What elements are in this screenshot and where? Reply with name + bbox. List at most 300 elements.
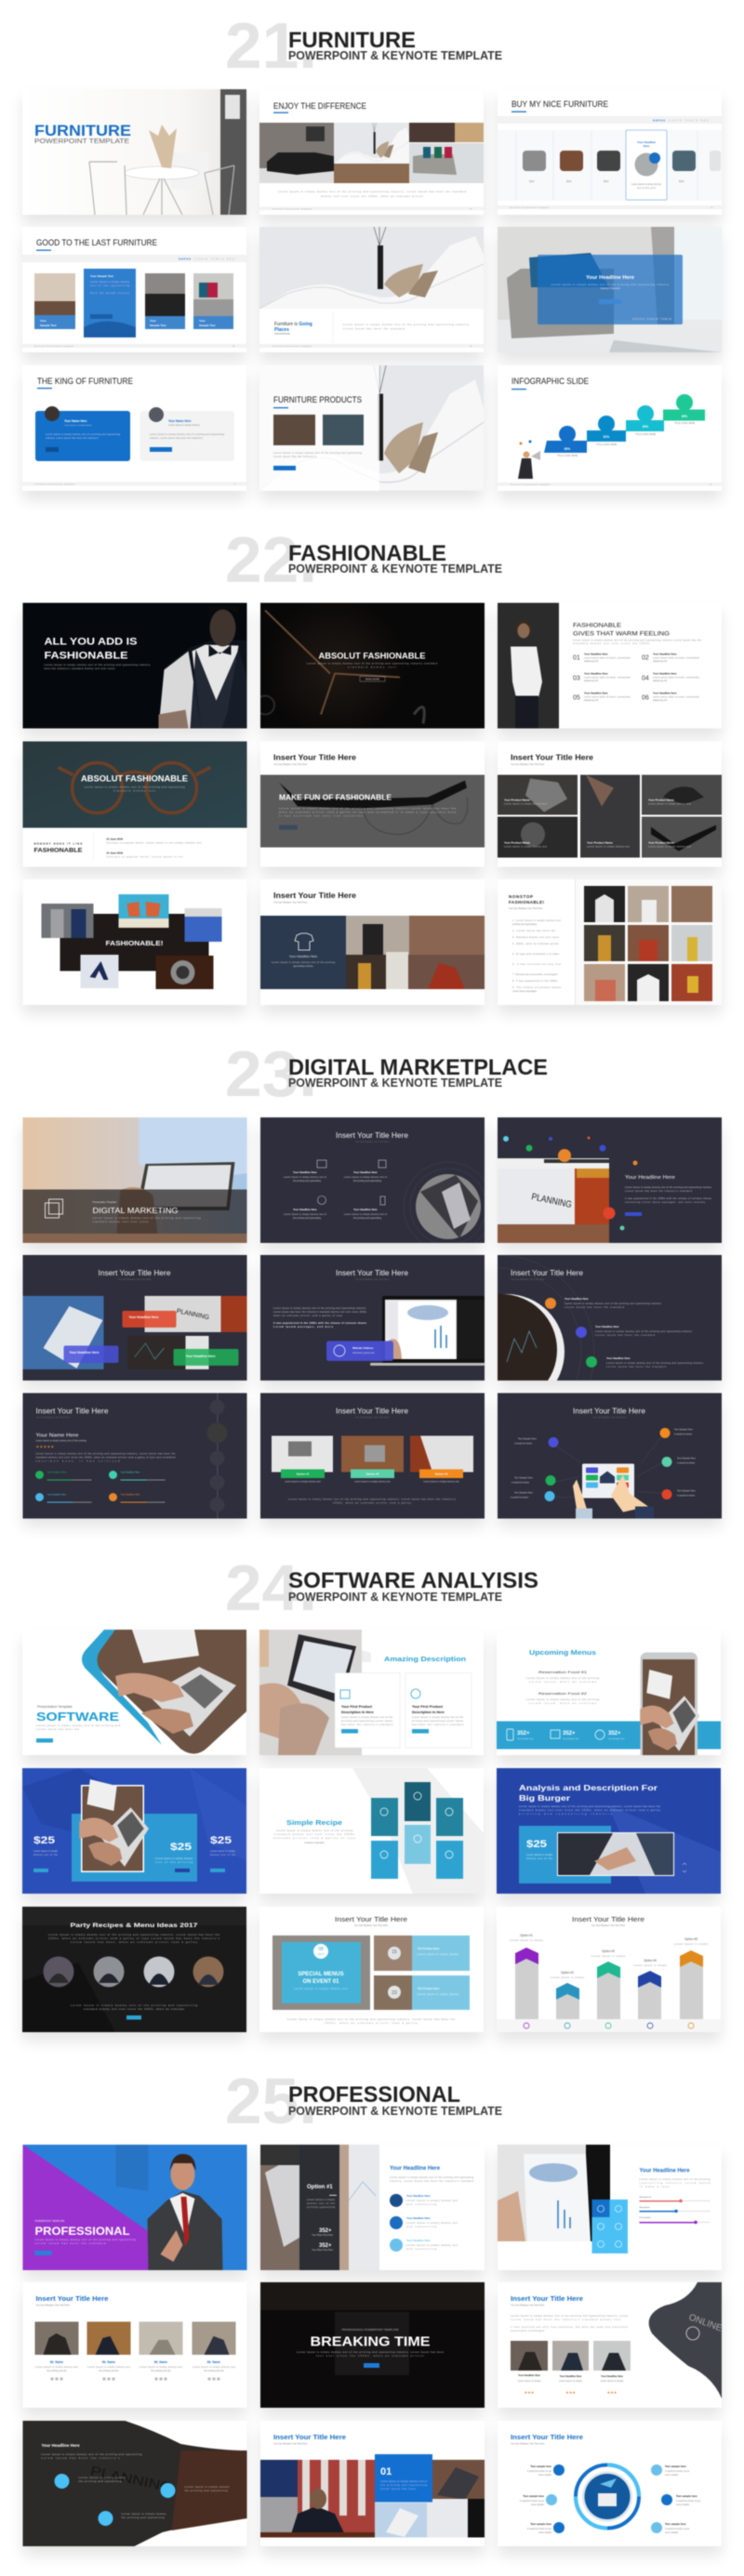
slide: analysis and description: $25 <box>526 1839 547 1850</box>
slide: collage fashionable <box>22 879 247 1005</box>
slide: number one with photos: the printing and typesetting <box>380 2484 428 2487</box>
slide: upcoming menus: Reservation Food #1 <box>538 1670 588 1674</box>
slide: product tiles: Insert Your Title Here <box>511 753 594 762</box>
slide: four icons with phone circle <box>260 1117 493 1251</box>
slide: king of furniture: Your Name Here <box>64 419 87 423</box>
slide: absolut fashionable watch <box>259 602 485 729</box>
slide: four icons with phone circle: Lorem Ipsum is simply dummy text of <box>284 1176 326 1179</box>
slide: tablet hands diagram: It would be better <box>511 1497 528 1499</box>
slide: analysis and description: Lorem Ipsum is simply <box>526 1854 553 1856</box>
slide: navy tile photo grid: Lorem Ipsum is simply dummy text of the printing <box>272 961 336 964</box>
slide: five option bars: Option #3 <box>602 1949 615 1953</box>
slide: nonstop fashionable grid: 5. Of type and scrambled it to make <box>512 953 560 956</box>
slide: team of four: the printing and the <box>204 2370 224 2372</box>
slide: navy tile photo grid: Your Headline Here <box>289 955 317 958</box>
slide: online marketing cards: You Can Replace Your Text Here <box>117 1278 152 1281</box>
slide: buy my nice furniture: text of the print <box>637 187 656 190</box>
slide: wooden glasses: 21 June 2018 <box>106 837 123 840</box>
slide: professional cover: PROFESSIONAL <box>35 2225 130 2238</box>
slide: product tiles: Lorem Ipsum is simply dummy text <box>504 803 547 805</box>
slide: buy my nice furniture: $200 <box>604 180 609 183</box>
slide: king of furniture: Lorem Ipsum is simply dummy text of a printing and typesetting <box>46 433 121 436</box>
slide: four icons with phone circle: Your Headline Here <box>293 1208 317 1211</box>
slide: good to the last furniture: Furniture Presentation Template <box>34 345 74 348</box>
slide: planning notebook: containing Lorem Ipsum passages, and more recently <box>625 1201 706 1204</box>
slide: center circle diagram: It would be better to put <box>665 2528 689 2530</box>
slide: software cover: SOFTWARE <box>36 1710 119 1724</box>
slide: your name profile: Lorem Ipsum is simply dummy text of the printing and typesetting industry. Lorem Ipsum has been the <box>35 1452 176 1456</box>
slide: three nodes half circle: You Can Replace Your Text Here <box>511 1278 545 1281</box>
slide: center circle diagram: It would be better to put <box>527 2528 551 2530</box>
slide: special menus: The Product Here <box>418 1947 440 1950</box>
heading: 21 Furniture: POWERPOINT & KEYNOTE TEMPLATE <box>288 49 502 62</box>
slide: four icons with phone circle: Lorem Ipsum is simply dummy text of <box>344 1176 387 1179</box>
slide: planning notebook <box>498 1117 722 1243</box>
slide: upcoming menus: 352+ <box>517 1731 530 1737</box>
slide: three people with wave photo: Lorem Ipsum is simply <box>601 2380 624 2383</box>
slide: option one strip: printing typesetting <box>307 2206 336 2209</box>
slide: breaking time: text ever since the 1500s, when an unknown printer <box>316 2355 424 2358</box>
slide: five option bars: Option #5 <box>684 1937 698 1941</box>
slide: analysis and description: Lorem Ipsum is simply dummy text of the printing and typesetting industry. Lorem Ipsum has been the <box>519 1805 661 1808</box>
slide: option one strip: and typesetting <box>406 2248 437 2251</box>
slide: amazing description: Lorem Ipsum is simply dummy text of the <box>341 1716 393 1719</box>
slide: your name profile: ★★★★★ <box>35 1445 54 1448</box>
slide: special menus: Lorem Ipsum is simply dummy text <box>294 1988 348 1990</box>
slide: warm feeling list: 03 <box>573 675 580 682</box>
slide: planning dark wave: Lorem Ipsum is simply dummy <box>184 2486 230 2489</box>
slide: digital marketing cover: DIGITAL MARKETING <box>93 1207 179 1215</box>
slide: tablet hands diagram: Text Sample Here <box>677 1489 696 1493</box>
slide: upcoming menus: Lorem Ipsum, when an unknown <box>529 1681 597 1684</box>
slide: party recipes: 1500s, when an unknown printer took a galley of type Lorem Ipsum has been the industry's <box>48 1937 220 1940</box>
slide: tablet map with skill bars: in make a type <box>640 2186 670 2188</box>
slide: wooden glasses: NOBODY DOES IT LIKE <box>33 842 82 846</box>
slide: king of furniture: 9 <box>234 483 236 485</box>
slide: software cover <box>22 1630 246 1755</box>
slide: warm feeling list: 06 <box>642 695 649 701</box>
slide: amazing description: printing and typesetting Lorem Ipsum <box>412 1720 463 1723</box>
slide: tablet map with skill bars: Lorem Ipsum is simply dummy text of the printing <box>640 2178 711 2181</box>
slide: team of four: the printing and the <box>151 2370 171 2372</box>
slide: three people with wave photo: ★★★ <box>525 2390 535 2395</box>
slide: nonstop fashionable grid: Lorem Ipsum passages <box>512 990 538 993</box>
slide: three options: Option #1 <box>297 1473 310 1476</box>
slide: three people with wave photo: ★★★ <box>565 2390 576 2395</box>
slide: enjoy the difference: 21 <box>470 208 472 210</box>
slide: absolut fashionable watch: Lorem Ipsum is simply dummy text of the printing and typesetting industry standard <box>307 662 438 666</box>
slide: product tiles: Your Product Name <box>587 840 613 844</box>
slide: blue pricing: dummy text of the <box>210 1854 236 1856</box>
slide: furniture products <box>259 365 484 491</box>
slide: collage fashionable: FASHIONABLE! <box>106 939 164 947</box>
heading: 21 Furniture: 21. <box>225 9 317 82</box>
slide: three nodes half circle: Lorem Ipsum has been the standard <box>595 1334 656 1337</box>
slide: three options: Lorem Ipsum is simply dummy text <box>423 1480 459 1484</box>
slide: center circle diagram: It would be better to put <box>527 2470 551 2473</box>
slide: tablet hands diagram <box>498 1393 722 1519</box>
slide: planning dark wave: Your Headline Here <box>41 2443 80 2448</box>
slide: center circle diagram: Text sample here <box>676 2494 698 2498</box>
slide: special menus: 15 <box>392 1949 397 1955</box>
slide: upcoming menus: Lorem Ipsum is simply dummy text of the printing <box>526 1677 600 1680</box>
slide: four icons with phone circle: the printing and typesetting <box>353 1180 382 1182</box>
slide: amazing description: Description In Here <box>341 1711 374 1714</box>
slide: simple recipe: Industry's standard <box>304 1842 325 1844</box>
slide: amazing description: Lorem Ipsum is simply dummy text of the <box>412 1716 464 1719</box>
slide: nonstop fashionable grid: FASHIONABLE! <box>509 900 545 905</box>
slide: blue sofa overlay: Industry's Standard <box>600 287 620 290</box>
slide: analysis and description: Big Burger <box>519 1794 570 1803</box>
slide: all you add is fashionable: ALL YOU ADD IS <box>45 636 138 647</box>
slide: analysis and description <box>497 1768 721 1894</box>
slide: furniture products: Lorem Ipsum has the Industry's <box>273 456 317 458</box>
slide: warm feeling list: Your Headline Here <box>584 653 608 656</box>
slide: furniture cover: FURNITURE <box>34 122 131 139</box>
slide: tablet hands diagram: It would be better <box>674 1433 692 1435</box>
slide: three options: You Can Replace Your Text Here <box>355 1417 390 1419</box>
slide: three options: Lorem Ipsum is simply dummy text of the printing and typesetting industry. Lorem Ipsum has been the industry's <box>288 1499 457 1500</box>
slide: make fun of fashionable: when an unknown printer took a galley of type and scrambled it to make a type specimen book <box>279 811 457 814</box>
slide: good to the last furniture <box>22 227 246 352</box>
slide: special menus: Lorem Ipsum is simply dummy text of the printing and typesetting industry. Lorem Ipsum has been the <box>287 2018 456 2021</box>
slide: good to the last furniture: Your <box>199 319 206 323</box>
slide: furniture is going places: 14 <box>470 346 472 348</box>
slide: three nodes half circle: Lorem Ipsum is simply dummy text of the printing and typesetting industry <box>565 1302 662 1305</box>
slide: product tiles: Your Product Name <box>648 840 674 844</box>
slide: make fun of fashionable: MAKE FUN OF FASHIONABLE <box>279 794 392 801</box>
slide: five option bars: Option #1 <box>520 1934 533 1937</box>
slide: furniture is going places: Places <box>274 327 289 333</box>
slide: upcoming menus: Your Number Text <box>608 1737 625 1740</box>
slide: planning dark wave: Lorem Ipsum is simply dummy <box>78 2477 126 2479</box>
slide: analysis and description: printing and typesetting industry <box>519 1813 613 1816</box>
slide: party recipes <box>22 1907 246 2032</box>
slide: four icons with phone circle: Your Headline Here <box>353 1208 378 1211</box>
slide: navy tile photo grid <box>260 879 485 1005</box>
slide: number one with photos: You Can Replace Your Text Here <box>273 2443 308 2445</box>
slide: upcoming menus <box>496 1636 722 1756</box>
slide: warm feeling list: Your Headline Here <box>584 671 608 675</box>
slide: upcoming menus: Lorem Ipsum, when an unknown <box>529 1702 597 1705</box>
slide: your name profile: specimen book. It has survived <box>35 1460 120 1463</box>
slide: nonstop fashionable grid: printing and typesetting <box>512 923 537 926</box>
slide: number one with photos: Lorem Ipsum has been <box>380 2488 417 2490</box>
slide: three options: Lorem Ipsum is simply dummy text <box>285 1480 321 1484</box>
slide: online marketing cards <box>22 1255 247 1380</box>
slide: buy my nice furniture: Here <box>644 144 650 148</box>
slide: special menus: 1500s, when an unknown printer took a galley <box>325 2022 418 2025</box>
slide: buy my nice furniture: Your Headline <box>637 140 656 144</box>
slide: good to the last furniture: Sample Text <box>40 324 56 327</box>
slide: furniture cover <box>22 89 246 215</box>
slide: your name profile <box>22 1393 247 1519</box>
slide: planning dark wave: Lorem Ipsum has been the industry's <box>41 2457 120 2460</box>
slide: five option bars: Insert Your Title Here <box>572 1915 644 1923</box>
slide: nonstop fashionable grid: NONSTOP <box>509 894 533 899</box>
slide: simple recipe: Simple Recipe <box>286 1820 342 1827</box>
slide: tablet hands diagram: It would be better <box>514 1443 532 1445</box>
slide: digital marketing cover: standard dummy text ever since <box>93 1221 149 1223</box>
slide: online marketing cards: Your Headline Here <box>186 1354 216 1358</box>
slide: make fun of fashionable <box>260 742 485 866</box>
slide: upcoming menus: Upcoming Menus <box>529 1650 596 1657</box>
slide: warm feeling list: FASHIONABLE <box>573 623 622 628</box>
slide: wooden glasses: Lorem Ipsum is simply dummy text of the printing and typesetting <box>84 786 185 788</box>
slide: infographic steps: 90% <box>643 425 648 429</box>
slide: product tiles: Your Product Name <box>504 840 530 844</box>
slide: warm feeling list: Your Headline Here <box>653 653 677 656</box>
slide: warm feeling list: 01 <box>573 654 580 662</box>
slide: option one strip: Your Headline Here <box>390 2166 441 2172</box>
slide: team of four: Lorem Ipsum is simply dummy text <box>35 2366 78 2369</box>
slide: good to the last furniture: text of the typesetting <box>90 284 130 287</box>
slide: make fun of fashionable: Lorem Ipsum is simply dummy text of the printing and typesetting industry Lorem Ipsum has been the <box>279 807 457 811</box>
heading: 23 Digital Marketplace: DIGITAL MARKETPLACE <box>288 1055 548 1080</box>
slide: center circle diagram: Insert Your Title Here <box>511 2433 583 2441</box>
slide: warm feeling list: Lorem ipsum dolor sit amet, consectetur <box>653 695 699 699</box>
slide: tablet map with skill bars: typesetting industry Lorem Ipsum <box>640 2182 711 2185</box>
slide: tablet hands diagram: Text Sample Here <box>514 1476 533 1480</box>
slide: software cover: Lorem Ipsum has been the <box>36 1728 80 1731</box>
slide: good to the last furniture: Lorem Ipsum is simply dummy <box>90 281 130 284</box>
slide: analysis and description: dummy text of the <box>526 1857 553 1860</box>
slide: team of four: Mr. Name <box>154 2360 167 2364</box>
slide: navy tile photo grid: You Can Replace Your Text Here <box>273 902 308 904</box>
heading: 24 Software Analyisis: POWERPOINT & KEYNOTE TEMPLATE <box>288 1591 502 1604</box>
slide: three people with wave photo: ONLINE <box>687 2312 724 2334</box>
slide: option one strip: Lorem Ipsum is simply dummy text <box>406 2244 458 2247</box>
slide: tablet on laptop: Lorem Ipsum passages, and more <box>273 1326 334 1328</box>
slide: blue pricing: Lorem Ipsum is simply <box>33 1850 59 1853</box>
slide: tablet map with skill bars: Management <box>640 2196 652 2199</box>
slide: three nodes half circle: Your Headline Here <box>595 1325 619 1328</box>
slide: center circle diagram: It would be better to put <box>665 2470 689 2473</box>
slide: special menus: 08 <box>318 1947 324 1952</box>
slide: three options: 1500s, when an unknown printer took a galley <box>333 1502 412 1504</box>
slide: all you add is fashionable: Lorem Ipsum is simply dummy text of the printing and typesetting industry <box>45 664 151 667</box>
slide: simple recipe: standard dummy text ever since the 1500s <box>274 1833 355 1836</box>
slide: three options: Lorem Ipsum is simply dummy text <box>354 1480 391 1484</box>
slide: planning dark wave: PLANNING <box>89 2463 174 2495</box>
slide: furniture is going places: Lorem Ipsum is simply dummy text of the printing and typesetting industry. <box>343 324 470 326</box>
slide: tablet on laptop: Lorem Ipsum is simply dummy text of the printing and typesetting industry. <box>273 1307 366 1310</box>
slide: simple recipe <box>259 1768 484 1894</box>
slide: digital marketing cover: Lorem Ipsum is simply dummy text of the printing and typesetting <box>93 1217 201 1220</box>
heading: 24 Software Analyisis <box>225 1552 538 1624</box>
slide: warm feeling list: 02 <box>642 654 649 662</box>
slide: digital marketing cover <box>22 1117 247 1243</box>
heading: 23 Digital Marketplace: POWERPOINT & KEYNOTE TEMPLATE <box>288 1077 502 1090</box>
slide: wooden glasses: 21 June 2018 <box>106 852 123 855</box>
slide: warm feeling list: adipiscing elit <box>653 680 667 682</box>
slide: good to the last furniture: SOFAS <box>179 257 191 260</box>
slide: three people with wave photo: You Can Replace Your Text Here <box>511 2304 545 2307</box>
slide: three people with wave photo: Lorem Ipsum has been the industry's standard dummy text <box>511 2318 620 2321</box>
slide: buy my nice furniture: CHAIR TABLE BED <box>669 119 710 123</box>
slide: nonstop fashionable grid: 1. Lorem Ipsum is simply dummy text <box>512 919 561 922</box>
slide: nonstop fashionable grid: 8. It was popularised in the 1960s <box>512 980 558 983</box>
slide: four icons with phone circle: the printing and typesetting <box>293 1217 322 1220</box>
slide: professional cover <box>22 2145 247 2270</box>
slide: center circle diagram: You Can Replace Your Text Here <box>511 2443 545 2445</box>
slide: four icons with phone circle: You Can Replace Your Text Here <box>355 1141 390 1143</box>
slide: good to the last furniture: Sample Text <box>199 324 215 327</box>
slide: blue pricing <box>22 1768 246 1894</box>
slide: king of furniture: Lorem Ipsum is simply dummy <box>64 424 92 427</box>
slide: party recipes: Party Recipes & Menu Ideas 2017 <box>71 1922 198 1929</box>
slide: king of furniture: Lorem Ipsum is simply dummy text of a printing and typesetting <box>150 433 225 436</box>
slide: tablet hands diagram: Text Sample Here <box>674 1428 693 1432</box>
slide: furniture products: FURNITURE PRODUCTS <box>273 395 362 404</box>
slide: tablet hands diagram: Text Sample Here <box>518 1437 537 1441</box>
slide: warm feeling list: Lorem ipsum dolor sit amet, consectetur <box>653 656 699 660</box>
slide: blue pricing: $25 <box>170 1842 192 1853</box>
heading: 25 Professional: POWERPOINT & KEYNOTE TEMPLATE <box>288 2105 502 2118</box>
slide: upcoming menus: Your Number Text <box>517 1737 534 1740</box>
slide: product tiles: Your Product Name <box>648 798 674 801</box>
slide: warm feeling list: adipiscing elit <box>653 660 667 663</box>
slide: absolut fashionable watch: ABSOLUT FASHIONABLE <box>318 651 426 660</box>
slide: infographic steps: Furniture Presentation Template <box>511 483 551 486</box>
slide: tablet on laptop: Insert Your Title Here <box>336 1269 409 1277</box>
slide: three people with wave photo: Lorem Ipsum is simply <box>559 2380 583 2383</box>
slide: wooden glasses: ABSOLUT FASHIONABLE <box>81 773 188 783</box>
slide: center circle diagram: some details <box>665 2531 679 2534</box>
slide: number one with photos: Insert Your Title Here <box>273 2433 346 2441</box>
slide: three people with wave photo: Your Headline Here <box>518 2373 540 2377</box>
slide: blue sofa overlay: SOFAS CHAIR TABLE <box>632 317 671 321</box>
slide: special menus <box>259 1907 484 2032</box>
slide: option one strip: Your Short Text Here <box>312 2249 334 2252</box>
slide: team of four: the printing and the <box>46 2370 67 2372</box>
slide: your name profile: Your Headline Here <box>121 1471 140 1474</box>
heading: 24 Software Analyisis: SOFTWARE ANALYISIS <box>288 1568 538 1593</box>
slide: number one with photos <box>260 2421 485 2546</box>
slide: analysis and description: standard dummy text ever since the 1500s, when an unknown printer took a galley <box>519 1809 661 1812</box>
slide: professional cover: Lorem Ipsum has been the standard <box>35 2242 106 2245</box>
slide: good to the last furniture: Your Sample Text <box>90 274 113 278</box>
slide: option one strip <box>260 2145 485 2270</box>
slide: product tiles: Lorem Ipsum is simply dummy text <box>648 846 691 848</box>
slide: option one strip: Your Headline Here <box>406 2239 431 2242</box>
slide: special menus: 23 <box>392 1990 397 1996</box>
slide: planning dark wave: the printing and typesetting <box>78 2480 122 2483</box>
slide: nonstop fashionable grid: 6. It has survived not only five <box>512 963 562 966</box>
slide: blue pricing: dummy text of the <box>33 1854 59 1856</box>
slide: warm feeling list: Your Headline Here <box>584 692 608 695</box>
slide: king of furniture <box>22 365 246 491</box>
slide: tablet on laptop: It was popularised in the 1960s with the release of Letraset sheets <box>273 1322 367 1325</box>
heading: 21 Furniture: FURNITURE <box>288 28 416 53</box>
slide: option one strip: Lorem Ipsum is simply <box>307 2199 336 2201</box>
slide: buy my nice furniture: Furniture Presentation Template <box>510 206 550 209</box>
slide: your name profile: Your Name Here <box>35 1433 79 1439</box>
slide: five option bars: Lorem Ipsum is simply <box>591 1955 626 1958</box>
slide: analysis and description: Analysis and Description For <box>519 1784 658 1792</box>
slide: professional cover: POWERPOINT TEMPLATE <box>35 2219 65 2223</box>
slide: tablet on laptop: when an unknown printer took a galley of type <box>273 1314 343 1317</box>
slide: good to the last furniture: Your <box>150 319 156 323</box>
slide: three people with wave photo: Insert Your Title Here <box>511 2294 583 2303</box>
slide: five option bars: Lorem Ipsum is simply <box>510 1939 544 1942</box>
slide: wooden glasses: standard dummy text <box>113 790 155 792</box>
slide: amazing description: has been the industry's standard <box>341 1724 393 1726</box>
slide: team of four: Mr. Name <box>102 2360 115 2364</box>
slide: three people with wave photo: Your Headline Here <box>601 2374 623 2378</box>
slide: wooden glasses: FASHIONABLE <box>33 848 82 853</box>
slide: warm feeling list: 04 <box>642 675 649 682</box>
slide: five option bars: Lorem Ipsum is simply <box>674 1943 709 1946</box>
slide: special menus: OCT <box>318 1952 324 1956</box>
slide: option one strip: 352+ <box>319 2243 332 2249</box>
slide: team of four: Insert Your Title Here <box>35 2294 108 2303</box>
slide: enjoy the difference: Lorem Ipsum is simply dummy text of the printing and typesetting industry. Lorem Ipsum has been the standard <box>278 191 467 193</box>
slide: center circle diagram: some details <box>538 2531 552 2534</box>
slide: three options: Insert Your Title Here <box>336 1407 409 1415</box>
slide: amazing description: printing and typesetting Lorem Ipsum <box>341 1720 392 1723</box>
slide: special menus: The Product Here <box>418 1987 440 1990</box>
slide: four icons with phone circle: Lorem Ipsum is simply dummy text of <box>344 1213 387 1216</box>
slide: tablet on laptop: www.lorem_ipsum.com <box>352 1352 375 1354</box>
slide: three people with wave photo <box>498 2282 724 2408</box>
slide: infographic steps: INFOGRAPHIC SLIDE <box>512 376 589 386</box>
slide: three people with wave photo: Lorem Ipsum is simply dummy text of the printing and typesetting industry. Lorem <box>511 2315 628 2318</box>
slide: nonstop fashionable grid: 9. The release of Letraset sheets <box>512 986 562 989</box>
slide: planning notebook: Your Headline Here <box>625 1175 675 1181</box>
slide: planning dark wave: the printing and typesetting <box>121 2517 165 2519</box>
slide: three people with wave photo: Your Headline Here <box>560 2374 582 2378</box>
slide: center circle diagram: It would be better to put <box>520 2500 544 2503</box>
slide: your name profile: Your Headline Here <box>121 1493 140 1497</box>
slide: online marketing cards: Insert Your Title Here <box>99 1269 171 1277</box>
slide: enjoy the difference: Furniture Presentation Template <box>272 207 312 210</box>
slide: planning dark wave <box>22 2421 247 2546</box>
slide: product tiles: Lorem Ipsum is simply dummy text <box>504 846 547 848</box>
slide: good to the last furniture: 16 <box>232 346 235 348</box>
slide: infographic steps: 95% <box>682 415 687 418</box>
slide: infographic steps: TITLE GOES HERE <box>674 422 696 425</box>
slide: tablet hands diagram: You Can Replace Your Text Here <box>592 1417 627 1419</box>
slide: number one with photos: Lorem Ipsum is simply dummy text of <box>380 2480 427 2483</box>
slide: nonstop fashionable grid: 4. 1500s, when an unknown printer <box>512 943 559 945</box>
slide: planning dark wave: Lorem Ipsum is simply dummy <box>121 2513 166 2516</box>
slide: upcoming menus: Reservation Food #2 <box>538 1691 588 1696</box>
slide: upcoming menus: Lorem Ipsum is simply dummy text of the printing <box>526 1698 600 1701</box>
slide: warm feeling list: Lorem ipsum dolor sit amet, consectetur <box>653 677 699 679</box>
slide: good to the last furniture: Here the actual content <box>90 292 129 295</box>
slide: furniture is going places <box>259 227 484 352</box>
slide: three people with wave photo: Lorem Ipsum is simply <box>518 2380 541 2383</box>
slide: infographic steps: 81% <box>604 435 609 439</box>
slide: tablet hands diagram: It would be better <box>512 1482 529 1484</box>
slide: your name profile: Your Headline Here <box>46 1471 67 1474</box>
slide: center circle diagram: Text sample here <box>530 2522 551 2526</box>
slide: absolut fashionable watch: READ MORE <box>365 678 379 680</box>
slide: party recipes: Lorem Ipsum is simply dummy text of the printing and typesetting <box>71 2004 198 2007</box>
slide: infographic steps: 80% <box>565 447 570 451</box>
slide: four icons with phone circle: Lorem Ipsum is simply dummy text of <box>284 1213 326 1216</box>
slide: tablet hands diagram: It would be better <box>677 1461 695 1465</box>
slide: special menus: Lorem Ipsum is simply dummy <box>418 1993 459 1996</box>
slide: special menus: ON EVENT 01 <box>302 1979 339 1985</box>
slide: king of furniture: Furniture Presentation Template <box>35 483 75 485</box>
slide: five option bars <box>497 1907 721 2032</box>
slide: product tiles: You Can Replace Your Text Here <box>511 763 545 766</box>
slide: all you add is fashionable <box>22 602 247 729</box>
slide: three options: Option #2 <box>366 1473 379 1476</box>
heading: 23 Digital Marketplace <box>225 1037 548 1110</box>
